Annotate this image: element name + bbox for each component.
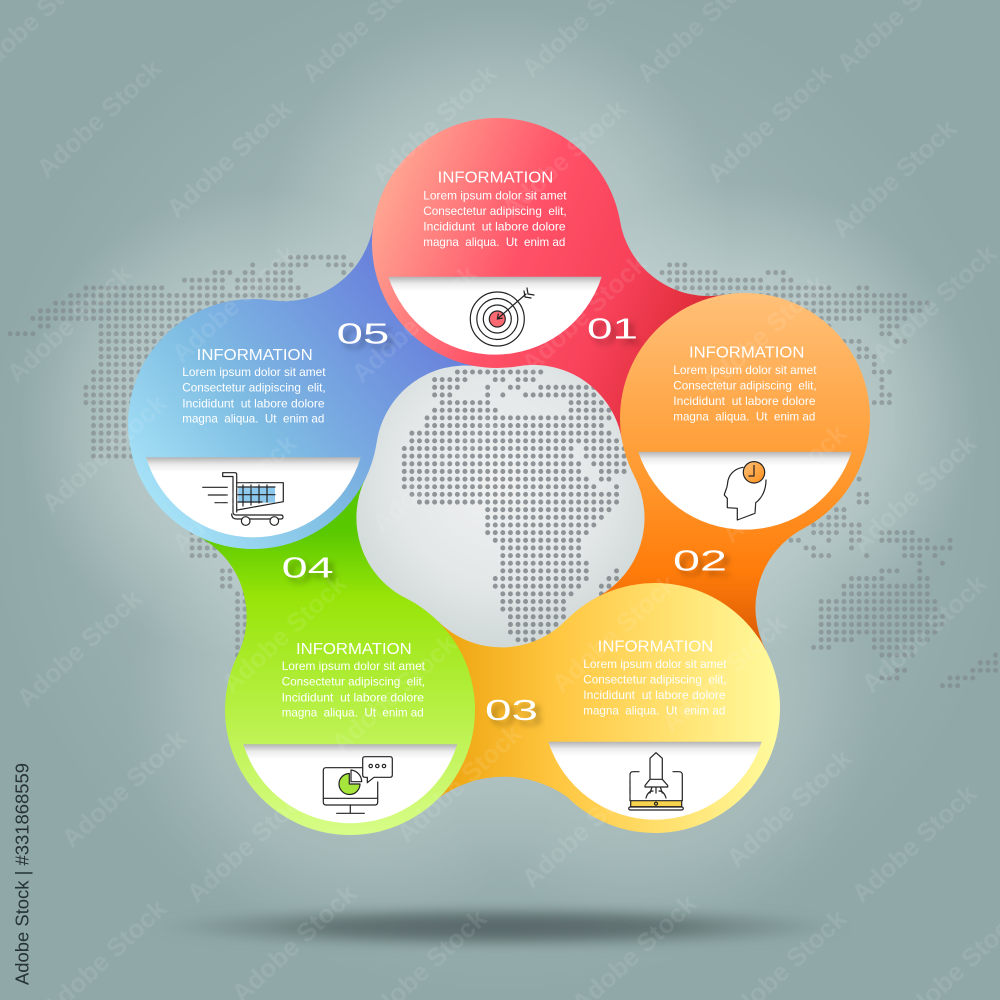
panel: step 01 [372,118,638,368]
watermark: Adobe Stock [546,568,683,699]
watermark: Adobe Stock [391,718,528,849]
text block 01: Consectetur adipiscing elit, [423,204,567,218]
heading 05: INFORMATION [197,347,313,364]
heading 03: INFORMATION [598,639,713,656]
number 03: 03 [485,695,538,727]
watermark: Adobe Stock [846,428,983,559]
white pocket 04 [243,744,457,823]
panel: step 02 [620,293,870,578]
white pocket 05 [146,457,361,537]
text block 02: magna aliqua. Ut enim ad [673,410,815,424]
watermark: Adobe Stock [216,568,353,699]
panel: step 05 [128,299,389,549]
number 02: 02 [673,546,727,578]
text block 04: Consectetur adipiscing elit, [282,675,425,689]
text block 01: Incididunt ut labore dolore [423,219,566,233]
watermark: Adobe Stock [856,568,993,699]
dotted world map [10,257,996,686]
watermark: Adobe Stock [866,238,1000,369]
watermark: Adobe Stock [516,248,653,379]
text block 02: Lorem ipsum dolor sit amet [673,363,817,377]
text block 05: Consectetur adipiscing elit, [182,381,326,395]
text block 02: Incididunt ut labore dolore [673,394,816,408]
watermark: Adobe Stock [161,93,298,224]
text block 02: Consectetur adipiscing elit, [673,379,817,393]
text block 04: Incididunt ut labore dolore [282,690,424,704]
text block 05 [182,365,326,426]
watermark: Adobe Stock [656,608,793,739]
watermark: Adobe Stock [716,418,853,549]
watermark: Adobe Stock [366,408,503,539]
connector: 04 green band [197,424,406,710]
heading 04: INFORMATION [296,641,412,658]
text block 04 [282,659,426,720]
panel: step 03 [485,583,780,833]
watermark: Adobe Stock [346,258,483,389]
text block 02 [673,363,817,424]
watermark: Adobe Stock [181,778,318,909]
connector: 01 red band [497,222,745,440]
connector: 03 yellow band [350,620,655,798]
watermark: Adobe Stock [166,428,303,559]
text block 03: Lorem ipsum dolor sit amet [583,657,727,671]
white pocket 03 [548,742,762,820]
heading 01: INFORMATION [438,170,553,187]
watermark: Adobe Stock [496,93,633,224]
heading 02: INFORMATION [689,345,804,362]
text block 03 [583,657,727,718]
text block 05: Incididunt ut labore dolore [182,396,325,410]
watermark: Adobe Stock [721,743,858,874]
text block 04: magna aliqua. Ut enim ad [282,706,424,720]
icon: monitor with pie chart and speech bubble [323,757,392,813]
watermark: Adobe Stock [516,763,653,894]
icon: shopping cart [203,473,283,525]
watermark: Adobe Stock [166,238,303,369]
text block 01 [423,188,567,249]
number 01: 01 [587,313,638,345]
text block 04: Lorem ipsum dolor sit amet [282,659,426,673]
watermark: Adobe Stock [701,58,838,189]
watermark: Adobe Stock [1,258,138,389]
watermark: Adobe Stock [366,58,503,189]
icon: head with clock [724,462,766,520]
watermark: Adobe Stock [826,113,963,244]
watermark: Adobe Stock [846,778,983,909]
watermark: Adobe Stock [31,53,168,184]
watermark: Adobe Stock [56,723,193,854]
watermark: Adobe Stock [326,628,463,759]
central light disc [325,325,675,675]
text block 03: Consectetur adipiscing elit, [583,673,727,687]
watermark: Adobe Stock [36,388,173,519]
watermark: Adobe Stock [696,268,833,399]
text block 03: Incididunt ut labore dolore [583,688,726,702]
connector: 05 blue band [253,225,497,442]
connector: 02 orange band [597,418,803,708]
number 05: 05 [337,318,389,350]
text block 03: magna aliqua. Ut enim ad [583,704,725,718]
text block 01: Lorem ipsum dolor sit amet [423,188,567,202]
icon: target with arrow [470,288,534,346]
text block 05: magna aliqua. Ut enim ad [182,412,324,426]
panel: step 04 [225,552,475,835]
white pocket 02 [638,452,852,530]
icon: rocket and laptop [629,753,683,810]
text block 01: magna aliqua. Ut enim ad [423,235,565,249]
text block 05: Lorem ipsum dolor sit amet [182,365,326,379]
white pocket 01 [388,277,602,355]
floor shadow [150,905,850,949]
stock id vertical text: Adobe Stock | #331868559 [12,763,32,985]
number 04: 04 [282,552,334,584]
watermark: Adobe Stock [11,583,148,714]
